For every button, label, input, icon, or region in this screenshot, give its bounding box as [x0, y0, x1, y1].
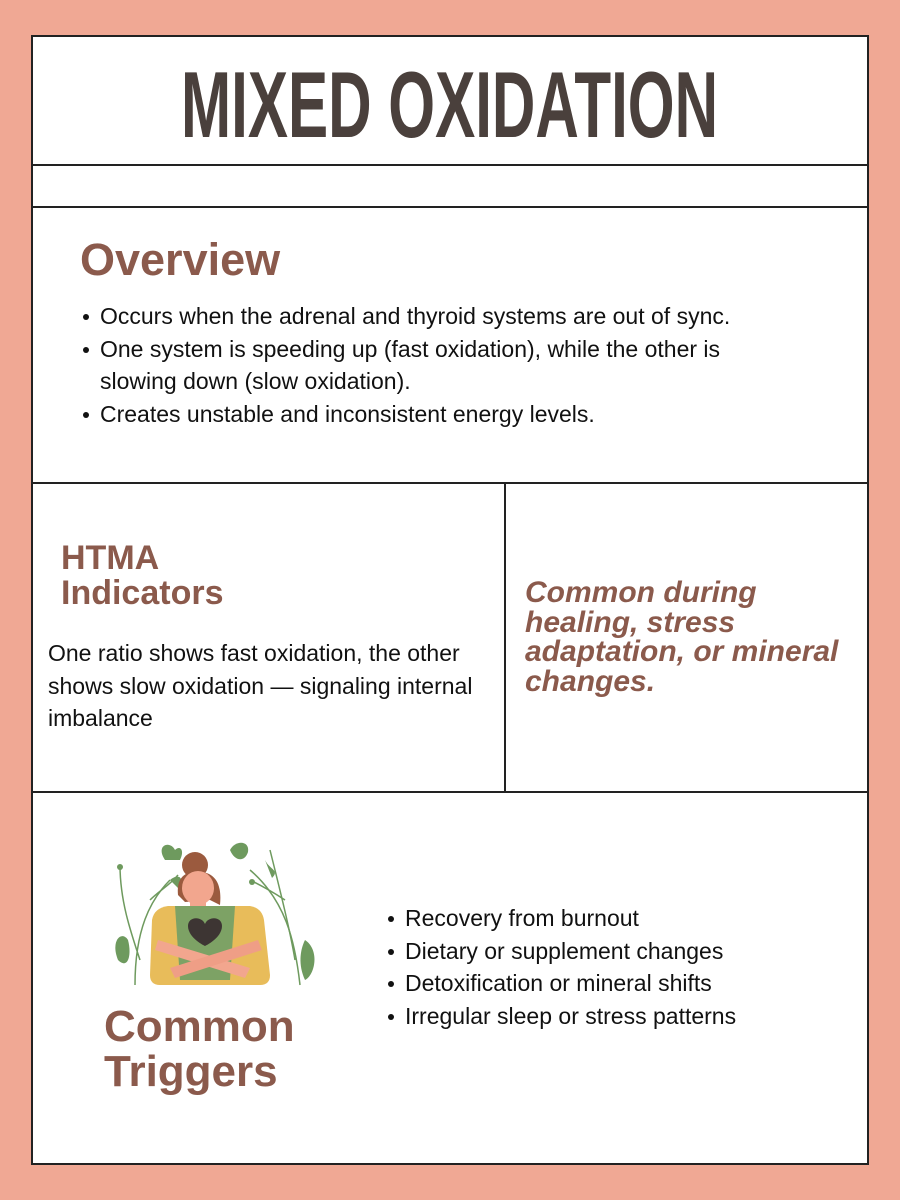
icon: woman hugging heart	[115, 842, 314, 986]
heading: common triggers	[104, 1002, 295, 1096]
text block: triggers bullets	[388, 905, 736, 1029]
heading: overview: Overview	[80, 234, 280, 285]
text block: triggers bullets: Irregular sleep or stress patterns	[405, 1002, 736, 1028]
heading: HTMA indicators	[61, 539, 223, 612]
callout: common during healing: Common during healing, stress adaptation, or mineral changes.	[525, 576, 838, 698]
title: MIXED OXIDATION	[181, 52, 718, 157]
text block: triggers bullets: Detoxification or mineral shifts	[405, 970, 712, 996]
text block: overview bullets: One system is speeding up (fast oxidation), while the other is slowing down (slow oxidation).	[100, 336, 720, 394]
text block: HTMA: One ratio shows fast oxidation, the other shows slow oxidation — signaling internal imbalance	[48, 640, 472, 731]
heading: HTMA indicators: Indicators	[61, 574, 223, 612]
text block: triggers bullets: Dietary or supplement changes	[405, 938, 723, 964]
text block: overview bullets	[83, 303, 730, 427]
text block: triggers bullets: Recovery from burnout	[405, 905, 639, 931]
text block: overview bullets: Occurs when the adrenal and thyroid systems are out of sync.	[100, 303, 730, 329]
text block: overview bullets: Creates unstable and inconsistent energy levels.	[100, 400, 595, 426]
heading: HTMA indicators: HTMA	[61, 539, 159, 577]
heading: common triggers: Triggers	[104, 1047, 278, 1096]
heading: common triggers: Common	[104, 1002, 295, 1051]
